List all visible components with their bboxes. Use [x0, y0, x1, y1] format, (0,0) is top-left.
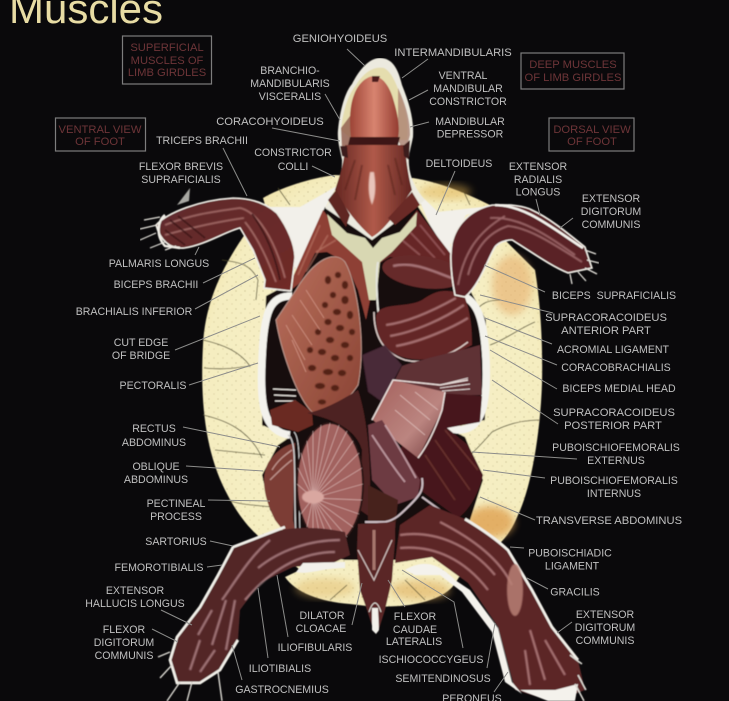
label: transverse abdominus: TRANSVERSE ABDOMINUS	[536, 515, 682, 527]
label: flexor digitorum communis: COMMUNIS	[95, 650, 153, 662]
label: pectineal process: PROCESS	[150, 511, 202, 523]
label: ventral mandibular constrictor: MANDIBULAR	[433, 83, 503, 95]
lower left dark muscle	[270, 400, 313, 432]
head and neck	[325, 58, 425, 240]
pale tendon branch	[365, 478, 440, 522]
label: branchiomandibularis visceralis: MANDIBULARIS	[250, 78, 330, 90]
label: biceps brachii: BICEPS BRACHII	[114, 279, 198, 291]
box: ventral view of foot	[56, 118, 146, 151]
label: oblique abdominus: ABDOMINUS	[124, 474, 188, 486]
right biceps belly	[380, 250, 466, 294]
label: extensor radialis longus: RADIALIS	[514, 174, 562, 186]
orange shading on right shell	[492, 255, 532, 315]
label: rectus abdominus: RECTUS	[132, 423, 176, 435]
label: puboischiadic ligament: PUBOISCHIADIC	[528, 548, 612, 560]
label: dilator cloacae: CLOACAE	[296, 623, 346, 635]
label: palmaris longus: PALMARIS LONGUS	[109, 258, 209, 270]
box: superficial muscles of limb girdles	[122, 36, 212, 84]
label: biceps supraficialis: BICEPS SUPRAFICIALIS	[552, 290, 676, 302]
label: ventral mandibular constrictor: CONSTRICTOR	[429, 96, 507, 108]
right foot claws	[570, 655, 586, 701]
supracoracoideus banded muscle right	[374, 291, 472, 361]
sternum cream band	[327, 212, 417, 300]
label: rectus abdominus: ABDOMINUS	[122, 437, 186, 449]
shell: carapace	[202, 175, 542, 607]
box: superficial muscles of limb girdles: LIMB GIRDLES	[128, 67, 206, 79]
label: gastrocnemius: GASTROCNEMIUS	[235, 684, 329, 696]
tail	[357, 522, 395, 634]
right claws	[570, 250, 599, 284]
brown speckled band	[307, 390, 370, 517]
white gaps beside neck	[262, 186, 337, 270]
box: dorsal view of foot	[549, 118, 634, 151]
tendon blob	[302, 490, 324, 504]
label: geniohyoideus: GENIOHYOIDEUS	[293, 33, 387, 45]
label: flexor caudae lateralis: LATERALIS	[386, 636, 442, 648]
label: ischiococcygeus: ISCHIOCOCCYGEUS	[379, 654, 483, 666]
label: coracobrachialis: CORACOBRACHIALIS	[561, 362, 671, 374]
red head	[350, 76, 399, 138]
label: mandibular depressor: MANDIBULAR	[435, 116, 505, 128]
left hand white cuff	[159, 215, 180, 248]
label: extensor digitorum communis upper: DIGITORUM	[581, 206, 641, 218]
box: dorsal view of foot: OF FOOT	[567, 136, 617, 148]
box: dorsal view of foot: DORSAL VIEW	[553, 124, 631, 136]
right leg white underside	[405, 564, 522, 694]
round pink muscle	[297, 423, 363, 545]
label: branchiomandibularis visceralis: BRANCHIO-	[260, 65, 320, 77]
label: mandibular depressor: DEPRESSOR	[437, 128, 504, 140]
scute lines	[203, 188, 540, 600]
label: extensor digitorum communis upper: COMMUNIS	[582, 219, 640, 231]
label: supracoracoideus anterior part: ANTERIOR PART	[561, 325, 651, 337]
box: superficial muscles of limb girdles: SUPERFICIAL	[130, 42, 204, 54]
chest muscle right	[378, 210, 463, 277]
small left tendon marks	[273, 389, 296, 401]
box: ventral view of foot: OF FOOT	[75, 136, 125, 148]
label: extensor radialis longus: EXTENSOR	[509, 161, 567, 173]
label: constrictor colli: CONSTRICTOR	[254, 147, 332, 159]
right leg	[395, 505, 586, 701]
label: branchiomandibularis visceralis: VISCERALIS	[259, 91, 321, 103]
label: semitendinosus: SEMITENDINOSUS	[395, 673, 491, 685]
dark throat band	[348, 137, 400, 145]
label: deltoideus: DELTOIDEUS	[426, 158, 492, 170]
label: flexor caudae lateralis: CAUDAE	[393, 624, 437, 636]
dark band right	[395, 345, 482, 396]
bridge cut edge left	[261, 296, 292, 435]
label: supracoracoideus posterior part: SUPRACORACOIDEUS	[553, 407, 675, 419]
box: deep muscles of limb girdles	[521, 53, 624, 89]
turtle illustration	[140, 58, 599, 701]
head white outline	[325, 58, 425, 240]
left claws	[140, 217, 176, 250]
pectoralis with spots	[276, 257, 361, 413]
label: pectoralis: PECTORALIS	[120, 380, 186, 392]
label: biceps medial head: BICEPS MEDIAL HEAD	[562, 383, 676, 395]
label: flexor brevis supraficialis: FLEXOR BREVIS	[139, 161, 223, 173]
label: extensor digitorum communis lower: DIGITORUM	[575, 622, 635, 634]
label: puboischiofemoralis internus: PUBOISCHIOFEMORALIS	[550, 475, 678, 487]
label: extensor radialis longus: LONGUS	[516, 186, 560, 198]
bridge cut edge right	[448, 295, 486, 430]
left foot claws	[158, 652, 222, 701]
label: supracoracoideus anterior part: SUPRACORACOIDEUS	[545, 312, 667, 324]
label: puboischiofemoralis externus: EXTERNUS	[587, 455, 645, 467]
box: deep muscles of limb girdles: OF LIMB GIRDLES	[525, 72, 621, 84]
label: extensor hallucis longus: HALLUCIS LONGUS	[85, 598, 185, 610]
label: puboischiadic ligament: LIGAMENT	[545, 560, 600, 572]
cream jaw band	[341, 68, 408, 140]
box: deep muscles of limb girdles: DEEP MUSCLES	[529, 59, 617, 71]
label: extensor digitorum communis lower: COMMUNIS	[576, 635, 634, 647]
right arm	[451, 205, 599, 297]
left arm web	[177, 188, 190, 205]
label: ventral mandibular constrictor: VENTRAL	[439, 70, 488, 82]
label: sartorius: SARTORIUS	[145, 536, 207, 548]
label: femorotibialis: FEMOROTIBIALIS	[115, 562, 203, 574]
left leg	[158, 527, 350, 701]
label: gracilis: GRACILIS	[550, 586, 600, 598]
label: acromial ligament: ACROMIAL LIGAMENT	[557, 344, 670, 356]
neck side muscles	[328, 190, 350, 227]
jaw muscle strip right	[398, 88, 410, 155]
label: extensor hallucis longus: EXTENSOR	[106, 585, 164, 597]
label: flexor caudae lateralis: FLEXOR	[394, 611, 437, 623]
label: iliofibularis: ILIOFIBULARIS	[278, 642, 352, 654]
label: flexor digitorum communis: DIGITORUM	[94, 637, 154, 649]
label: supracoracoideus posterior part: POSTERIOR PART	[564, 420, 662, 432]
label: dilator cloacae: DILATOR	[300, 610, 345, 622]
neck	[335, 145, 412, 237]
label: iliotibialis: ILIOTIBIALIS	[249, 663, 311, 675]
label: flexor brevis supraficialis: SUPRAFICIALIS	[141, 174, 221, 186]
label: brachialis inferior: BRACHIALIS INFERIOR	[76, 306, 193, 318]
jaw muscle strip left	[341, 112, 353, 150]
pink fan muscle right	[372, 378, 470, 458]
leader lines	[152, 49, 577, 692]
oblique muscle left	[264, 443, 300, 552]
label: puboischiofemoralis internus: INTERNUS	[587, 488, 641, 500]
lower dark muscle right	[398, 393, 483, 518]
central diagonal muscles	[365, 420, 440, 530]
label: coracohyoideus: CORACOHYOIDEUS	[216, 116, 324, 128]
label: oblique abdominus: OBLIQUE	[132, 461, 180, 473]
box: ventral view of foot: VENTRAL VIEW	[59, 124, 142, 136]
label: cut edge of bridge: CUT EDGE	[114, 337, 168, 349]
label: flexor digitorum communis: FLEXOR	[103, 624, 146, 636]
purple patch	[362, 345, 402, 402]
label: extensor digitorum communis upper: EXTENSOR	[582, 193, 640, 205]
label: constrictor colli: COLLI	[278, 161, 308, 173]
torso base	[262, 205, 486, 560]
label: triceps brachii: TRICEPS BRACHII	[156, 135, 248, 147]
label: cut edge of bridge: OF BRIDGE	[112, 350, 170, 362]
label: puboischiofemoralis externus: PUBOISCHIOFEMORALIS	[552, 442, 680, 454]
chest muscle left	[288, 210, 372, 320]
label: extensor digitorum communis lower: EXTENSOR	[576, 609, 634, 621]
box: superficial muscles of limb girdles: MUSCLES OF	[131, 55, 204, 67]
label: pectineal process: PECTINEAL	[147, 498, 206, 510]
left arm	[140, 188, 295, 291]
label: intermandibularis: INTERMANDIBULARIS	[394, 47, 512, 59]
